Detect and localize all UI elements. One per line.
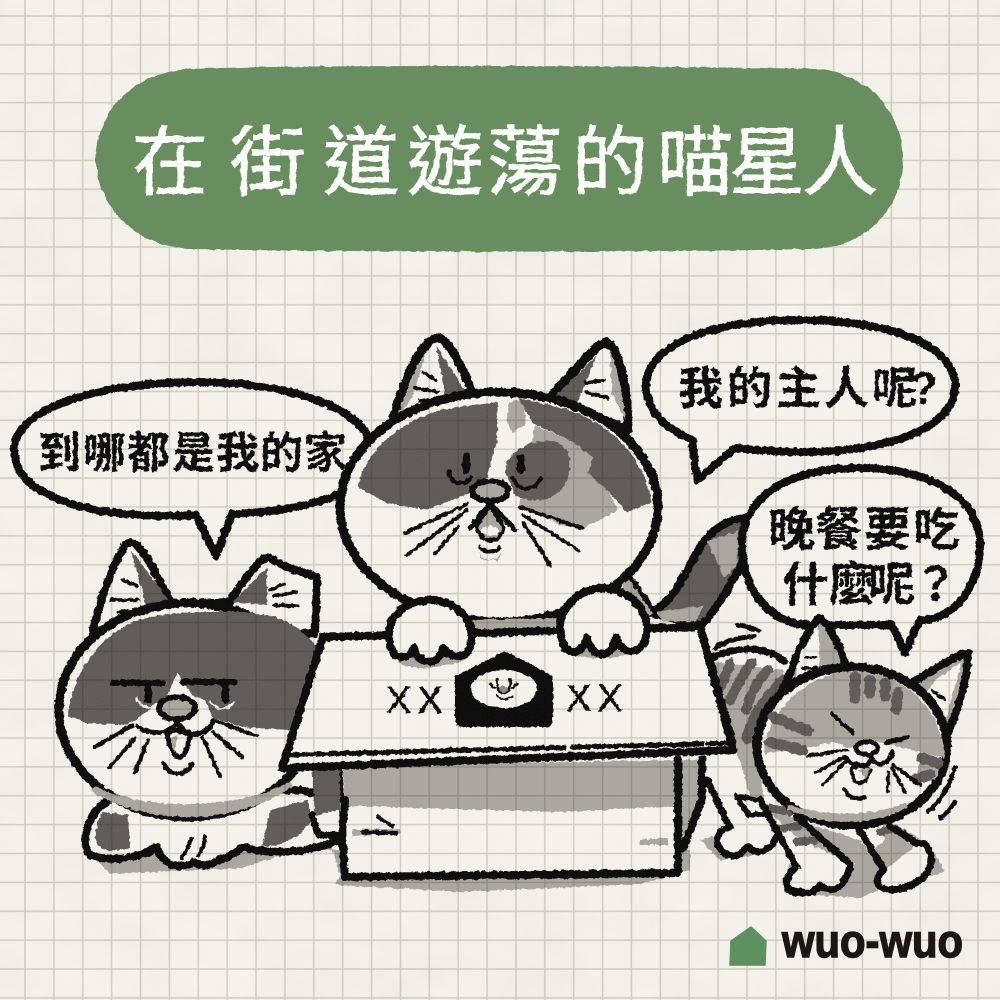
XX left: XX bbox=[386, 680, 449, 722]
brand name: wuo-wuo bbox=[781, 915, 963, 967]
ground shadows bbox=[88, 815, 945, 898]
XX right: XX bbox=[566, 678, 629, 720]
speech bubble: right bbox=[742, 468, 980, 653]
center cat: left paw bbox=[389, 600, 472, 662]
left cat: body and paw bbox=[85, 770, 345, 866]
brand logo bbox=[730, 915, 963, 967]
eyes bbox=[832, 714, 908, 743]
eyes bbox=[113, 682, 235, 709]
bubble text: right line 2: 什麼呢？ bbox=[782, 558, 959, 611]
striped cat: tail bbox=[650, 518, 752, 625]
left cat: ears bbox=[92, 542, 317, 640]
speech bubble: top right bbox=[646, 320, 955, 480]
center cat: head bbox=[340, 392, 658, 631]
tan patch bbox=[507, 400, 618, 528]
collar shadow bbox=[470, 618, 560, 631]
nose and mouth bbox=[844, 742, 892, 799]
eyes bbox=[449, 456, 541, 488]
nose and mouth bbox=[470, 481, 515, 560]
box scribbles bbox=[352, 817, 668, 845]
striped cat: paws bbox=[717, 827, 931, 893]
grey coat bbox=[764, 671, 945, 758]
illustration bbox=[14, 320, 980, 898]
whiskers bbox=[95, 720, 257, 776]
whiskers bbox=[405, 504, 582, 565]
cardboard box bbox=[338, 760, 702, 877]
striped cat: ears bbox=[783, 618, 968, 732]
nose and mouth bbox=[138, 697, 213, 774]
badge: house logo on lid bbox=[455, 651, 553, 727]
center cat: ears bbox=[392, 338, 628, 430]
left cat: head bbox=[59, 603, 318, 817]
title text: 在街道遊蕩的喵星人 bbox=[132, 121, 878, 206]
bubble text: right line 1: 晚餐要吃 bbox=[768, 503, 960, 556]
whiskers bbox=[807, 750, 920, 792]
box lid bbox=[282, 627, 733, 768]
bubble text: top right: 我的主人呢? bbox=[678, 363, 938, 414]
head cap marking bbox=[68, 611, 318, 730]
striped cat: body bbox=[700, 622, 960, 870]
center cat: paw shadows bbox=[392, 632, 650, 668]
striped cat: head bbox=[757, 667, 947, 825]
dark patches bbox=[358, 402, 498, 510]
icon: green house bbox=[730, 927, 766, 965]
coat stripes bbox=[770, 677, 938, 779]
motion lines bbox=[928, 767, 955, 818]
bubble text: left: 到哪都是我的家 bbox=[38, 430, 347, 478]
speech bubble: left bbox=[14, 382, 372, 556]
center cat: body edge bbox=[612, 577, 655, 622]
title pill bbox=[96, 66, 903, 252]
center cat: right paw bbox=[560, 588, 647, 654]
